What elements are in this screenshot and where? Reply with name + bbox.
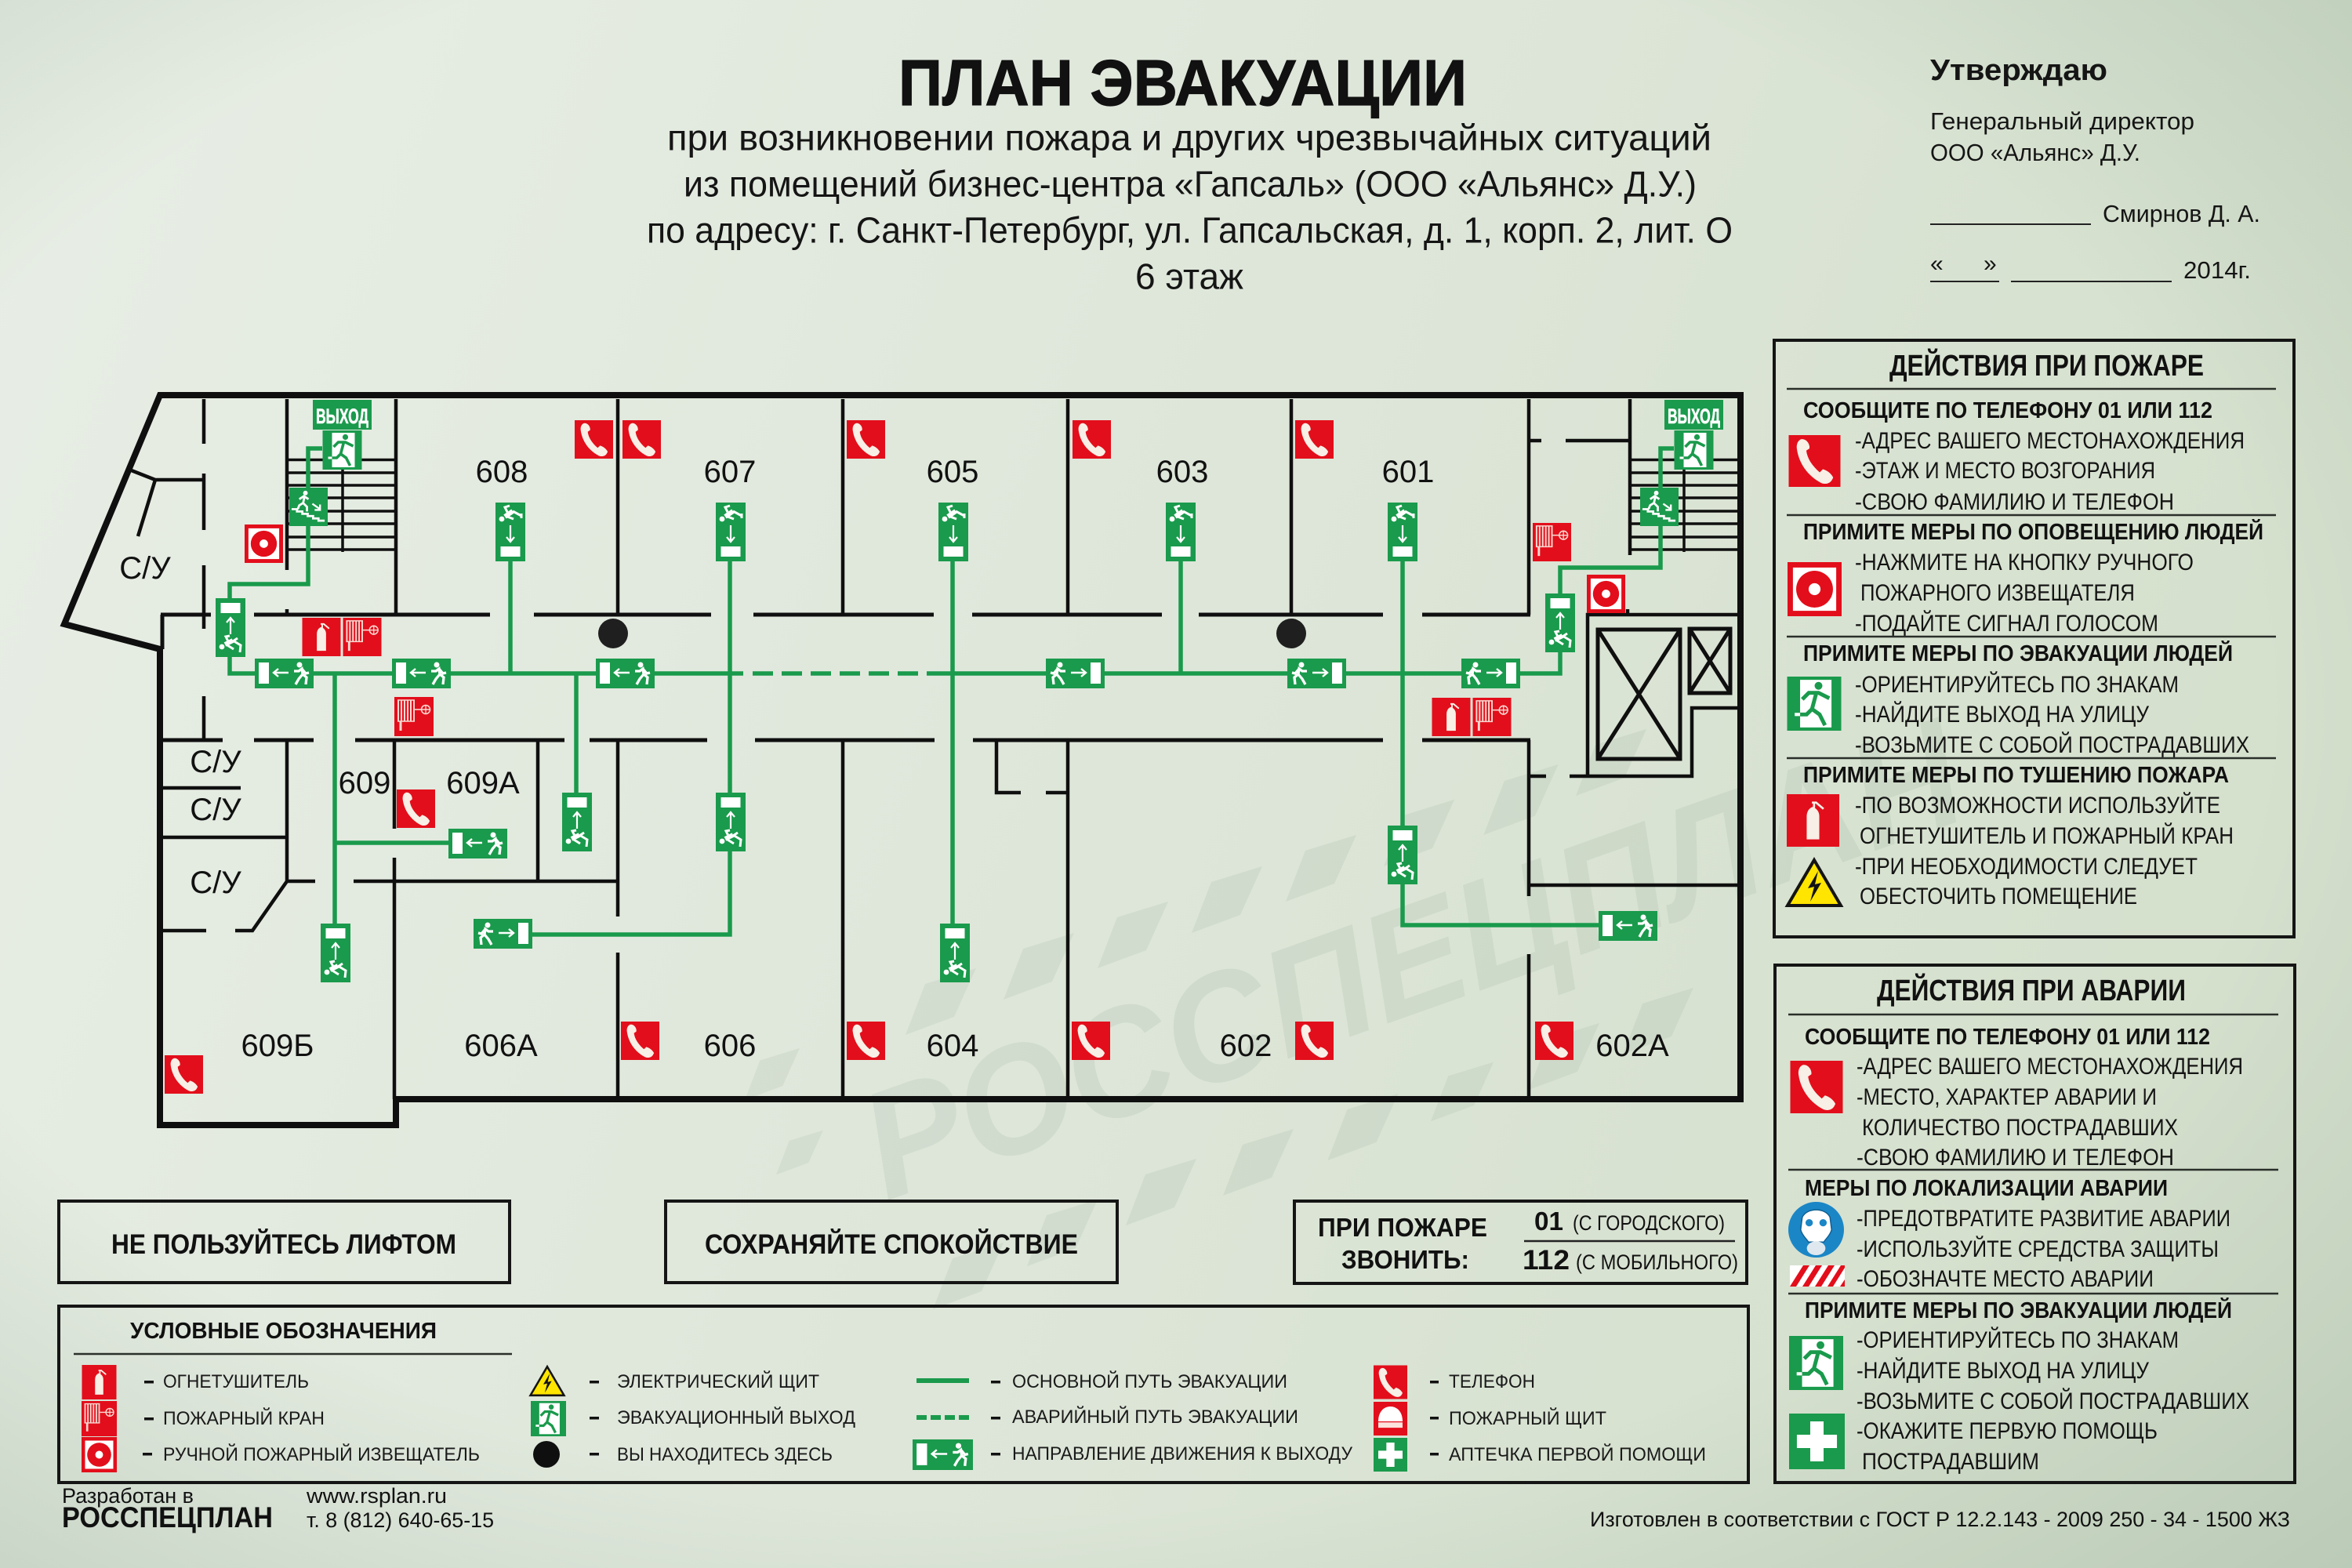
notice: stay calm <box>666 1201 1117 1283</box>
title: ПЛАН ЭВАКУАЦИИ <box>898 46 1467 119</box>
room labels: 602А <box>1595 1029 1669 1063</box>
legend item: extinguisher: ОГНЕТУШИТЕЛЬ <box>163 1371 309 1392</box>
room labels: С/У <box>190 866 241 900</box>
room labels: 609А <box>446 766 520 800</box>
legend item: you are here <box>533 1441 833 1468</box>
room labels: 609Б <box>241 1029 314 1063</box>
panel: actions in case of fire: ОГНЕТУШИТЕЛЬ И ПОЖАРНЫЙ КРАН <box>1860 822 2234 849</box>
panel: actions in case of fire: -ЭТАЖ И МЕСТО ВОЗГОРАНИЯ <box>1855 458 2155 484</box>
room labels: 608 <box>476 455 528 489</box>
legend item: first aid kit: АПТЕЧКА ПЕРВОЙ ПОМОЩИ <box>1449 1443 1706 1465</box>
legend item: electrical panel <box>531 1367 819 1396</box>
room labels: 606 <box>704 1029 756 1063</box>
legend: УСЛОВНЫЕ ОБОЗНАЧЕНИЯ <box>130 1319 437 1344</box>
panel: actions in case of fire: ОБЕСТОЧИТЬ ПОМЕЩЕНИЕ <box>1860 884 2137 909</box>
direction signs <box>216 503 1657 982</box>
footer: developer credit <box>62 1484 494 1534</box>
legend item: electrical panel: ЭЛЕКТРИЧЕСКИЙ ЩИТ <box>617 1370 819 1392</box>
legend item: telephone: ТЕЛЕФОН <box>1449 1371 1535 1392</box>
legend item: emergency exit: ЭВАКУАЦИОННЫЙ ВЫХОД <box>617 1406 855 1428</box>
legend item: main route: ОСНОВНОЙ ПУТЬ ЭВАКУАЦИИ <box>1012 1370 1287 1392</box>
panel: actions in case of accident: -ОРИЕНТИРУЙТЕСЬ ПО ЗНАКАМ <box>1857 1327 2179 1353</box>
exit left: ВЫХОД <box>316 405 368 428</box>
notice: emergency numbers: ПРИ ПОЖАРЕ <box>1318 1213 1487 1242</box>
panel: actions in case of fire: -ОРИЕНТИРУЙТЕСЬ ПО ЗНАКАМ <box>1855 671 2179 698</box>
panel: actions in case of fire: ДЕЙСТВИЯ ПРИ ПОЖАРЕ <box>1889 347 2204 383</box>
room labels: С/У <box>190 745 241 779</box>
approval block <box>1930 54 2260 284</box>
subtitle: по адресу: г. Санкт-Петербург, ул. Гапсальская, д. 1, корп. 2, лит. О <box>647 210 1733 251</box>
notice: emergency numbers <box>1294 1201 1747 1283</box>
you are here markers <box>598 619 1306 648</box>
panel: actions in case of accident: МЕРЫ ПО ЛОКАЛИЗАЦИИ АВАРИИ <box>1805 1176 2168 1201</box>
subtitle: при возникновении пожара и других чрезвычайных ситуаций <box>667 118 1711 158</box>
panel: actions in case of fire: ПОЖАРНОГО ИЗВЕЩАТЕЛЯ <box>1860 580 2135 606</box>
subtitle: из помещений бизнес-центра «Гапсаль» (ООО «Альянс» Д.У.) <box>684 163 1697 204</box>
legend item: emergency exit <box>531 1401 855 1436</box>
room labels: 604 <box>927 1029 978 1063</box>
legend item: telephone <box>1374 1366 1535 1399</box>
legend item: manual call point <box>82 1437 480 1472</box>
legend item: you are here: ВЫ НАХОДИТЕСЬ ЗДЕСЬ <box>617 1444 833 1465</box>
panel: actions in case of fire: ПРИМИТЕ МЕРЫ ПО ТУШЕНИЮ ПОЖАРА <box>1803 763 2229 788</box>
legend item: main route <box>916 1370 1287 1392</box>
panel: actions in case of accident: -СВОЮ ФАМИЛИЮ И ТЕЛЕФОН <box>1857 1145 2174 1171</box>
room labels: 601 <box>1382 455 1434 489</box>
floor plan <box>64 395 1740 1125</box>
panel: actions in case of accident: -НАЙДИТЕ ВЫХОД НА УЛИЦУ <box>1857 1357 2150 1384</box>
exit left <box>289 400 372 526</box>
panel: actions in case of accident: -ОБОЗНАЧТЕ МЕСТО АВАРИИ <box>1857 1266 2154 1292</box>
room labels: 605 <box>927 455 978 489</box>
panel: actions in case of accident: -АДРЕС ВАШЕГО МЕСТОНАХОЖДЕНИЯ <box>1857 1054 2243 1080</box>
legend item: emergency route <box>916 1406 1298 1428</box>
legend <box>59 1306 1748 1483</box>
panel: actions in case of accident: -ПРЕДОТВРАТИТЕ РАЗВИТИЕ АВАРИИ <box>1857 1206 2230 1232</box>
panel: actions in case of fire: ПРИМИТЕ МЕРЫ ПО ЭВАКУАЦИИ ЛЮДЕЙ <box>1803 640 2233 666</box>
legend item: extinguisher <box>82 1365 309 1399</box>
panel: actions in case of accident: ДЕЙСТВИЯ ПРИ АВАРИИ <box>1877 972 2186 1007</box>
legend item: direction sign: НАПРАВЛЕНИЕ ДВИЖЕНИЯ К ВЫХОДУ <box>1012 1443 1352 1465</box>
approval block: 2014г. <box>2183 256 2251 284</box>
panel: actions in case of accident: ПОСТРАДАВШИМ <box>1862 1449 2039 1475</box>
exit right <box>1640 400 1723 526</box>
panel: actions in case of fire: -ПОДАЙТЕ СИГНАЛ ГОЛОСОМ <box>1855 610 2158 637</box>
watermark: РОССПЕЦПЛАН <box>840 685 1986 1232</box>
panel: actions in case of accident: -ОКАЖИТЕ ПЕРВУЮ ПОМОЩЬ <box>1857 1418 2158 1444</box>
footer: developer credit: www.rsplan.ru <box>306 1484 447 1508</box>
panel: actions in case of fire: -ПРИ НЕОБХОДИМОСТИ СЛЕДУЕТ <box>1855 854 2198 880</box>
panel: actions in case of fire: -СВОЮ ФАМИЛИЮ И ТЕЛЕФОН <box>1855 489 2174 515</box>
notice: do not use the lift: НЕ ПОЛЬЗУЙТЕСЬ ЛИФТОМ <box>111 1229 456 1260</box>
panel: actions in case of fire: СООБЩИТЕ ПО ТЕЛЕФОНУ 01 ИЛИ 112 <box>1803 398 2212 423</box>
panel: actions in case of fire: -ПО ВОЗМОЖНОСТИ ИСПОЛЬЗУЙТЕ <box>1855 792 2220 818</box>
approval block: » <box>1984 251 1997 277</box>
legend item: manual call point: РУЧНОЙ ПОЖАРНЫЙ ИЗВЕЩАТЕЛЬ <box>163 1443 480 1465</box>
panel: actions in case of accident: -ВОЗЬМИТЕ С СОБОЙ ПОСТРАДАВШИХ <box>1857 1388 2249 1414</box>
panel: actions in case of accident <box>1775 965 2295 1483</box>
room labels: С/У <box>190 793 241 827</box>
panel: actions in case of accident: СООБЩИТЕ ПО ТЕЛЕФОНУ 01 ИЛИ 112 <box>1805 1025 2210 1050</box>
subtitle <box>647 118 1733 296</box>
panel: actions in case of fire: ПРИМИТЕ МЕРЫ ПО ОПОВЕЩЕНИЮ ЛЮДЕЙ <box>1803 518 2263 545</box>
panel: actions in case of fire <box>1774 340 2294 937</box>
room labels: 609 <box>339 766 390 800</box>
approval block: Генеральный директор <box>1930 107 2194 135</box>
legend item: fire hydrant <box>82 1401 325 1436</box>
room labels: С/У <box>119 551 171 586</box>
panel: actions in case of fire: -НАЖМИТЕ НА КНОПКУ РУЧНОГО <box>1855 550 2194 575</box>
exit right: ВЫХОД <box>1668 405 1720 428</box>
approval block: « <box>1930 251 1944 277</box>
room labels <box>119 455 1669 1063</box>
panel: actions in case of fire: -ВОЗЬМИТЕ С СОБОЙ ПОСТРАДАВШИХ <box>1855 731 2249 758</box>
notice: emergency numbers: (С ГОРОДСКОГО) <box>1573 1211 1725 1235</box>
approval block: ООО «Альянс» Д.У. <box>1930 139 2140 166</box>
footer: developer credit: Разработан в <box>62 1484 194 1508</box>
subtitle: 6 этаж <box>1135 256 1243 296</box>
panel: actions in case of accident: КОЛИЧЕСТВО ПОСТРАДАВШИХ <box>1862 1115 2178 1141</box>
room labels: 602 <box>1220 1029 1272 1063</box>
notice: stay calm: СОХРАНЯЙТЕ СПОКОЙСТВИЕ <box>705 1229 1078 1260</box>
legend item: fire shield <box>1374 1402 1606 1436</box>
footer: developer credit: т. 8 (812) 640-65-15 <box>307 1508 494 1532</box>
panel: actions in case of fire: -НАЙДИТЕ ВЫХОД НА УЛИЦУ <box>1855 701 2150 728</box>
lift shafts <box>1598 629 1730 759</box>
footer: standard note: Изготовлен в соответствии с ГОСТ Р 12.2.143 - 2009 250 - 34 - 1500 ЖЗ <box>1590 1508 2290 1531</box>
walls <box>64 395 1740 1125</box>
approval block: Утверждаю <box>1930 54 2107 87</box>
legend item: first aid kit <box>1374 1438 1706 1472</box>
room labels: 607 <box>704 455 756 489</box>
evacuation routes <box>230 448 1674 935</box>
approval block: Смирнов Д. А. <box>2103 200 2260 227</box>
notice: emergency numbers: 01 <box>1534 1207 1563 1236</box>
panel: actions in case of accident: -МЕСТО, ХАРАКТЕР АВАРИИ И <box>1857 1084 2157 1110</box>
panel: actions in case of accident: -ИСПОЛЬЗУЙТЕ СРЕДСТВА ЗАЩИТЫ <box>1857 1236 2219 1262</box>
legend item: direction sign <box>913 1439 1352 1470</box>
stairs right <box>1630 459 1737 552</box>
room labels: 606А <box>464 1029 538 1063</box>
room labels: 603 <box>1156 455 1208 489</box>
notice: emergency numbers: 112 <box>1523 1245 1570 1276</box>
legend item: fire shield: ПОЖАРНЫЙ ЩИТ <box>1449 1407 1606 1429</box>
notice: do not use the lift <box>59 1201 510 1283</box>
stairs left <box>287 459 396 552</box>
notice: emergency numbers: ЗВОНИТЬ: <box>1341 1245 1469 1274</box>
panel: actions in case of fire: -АДРЕС ВАШЕГО МЕСТОНАХОЖДЕНИЯ <box>1855 428 2245 454</box>
legend item: fire hydrant: ПОЖАРНЫЙ КРАН <box>163 1407 325 1429</box>
notice: emergency numbers: (С МОБИЛЬНОГО) <box>1576 1250 1738 1274</box>
footer: developer credit: РОССПЕЦПЛАН <box>62 1501 273 1534</box>
legend item: emergency route: АВАРИЙНЫЙ ПУТЬ ЭВАКУАЦИИ <box>1012 1406 1298 1428</box>
fire equipment and phones <box>165 420 1625 1094</box>
panel: actions in case of accident: ПРИМИТЕ МЕРЫ ПО ЭВАКУАЦИИ ЛЮДЕЙ <box>1805 1297 2232 1323</box>
